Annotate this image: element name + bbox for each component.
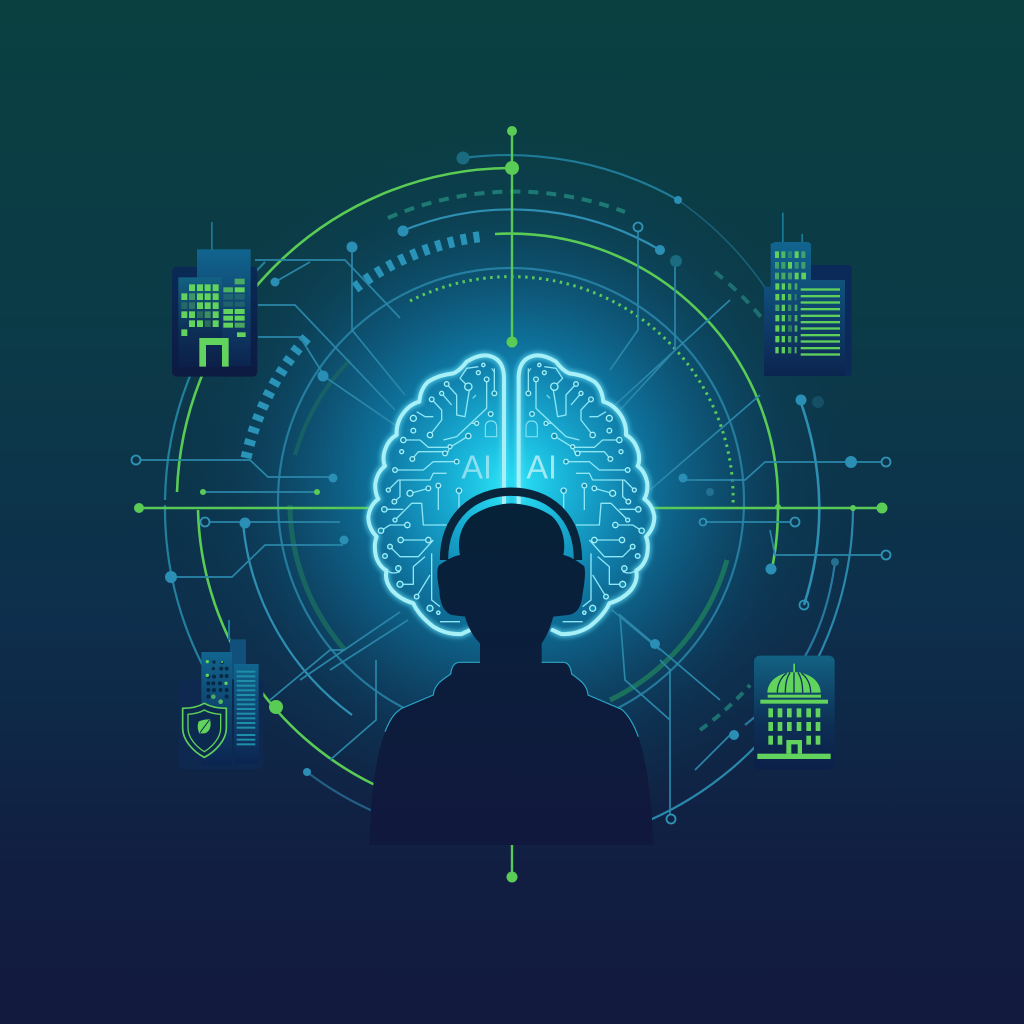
building: top right: [764, 213, 852, 376]
ring: inner blue: [278, 268, 744, 734]
hemisphere: right: [519, 355, 654, 634]
axis: green crosshair lines: [139, 131, 882, 877]
label: AI right: AI: [526, 450, 557, 487]
ring: dashed arcs: [388, 192, 625, 218]
nodes: [132, 126, 890, 882]
body: [369, 503, 653, 845]
central glow: [161, 130, 861, 830]
circuit traces: [141, 232, 881, 814]
headband: [444, 492, 578, 560]
icon: shield: [183, 703, 226, 757]
building: bottom right government dome: [754, 656, 835, 770]
person silhouette with headphones: [369, 492, 653, 845]
building: top left: [172, 222, 257, 377]
brain: [368, 355, 654, 634]
building: bottom left with shield: [179, 620, 263, 769]
hemisphere: left: [368, 355, 504, 634]
ring: green arcs: [177, 168, 512, 492]
ring: outer blue arcs: [165, 155, 853, 820]
concentric rings: [165, 155, 853, 820]
label: AI left: AI: [461, 450, 492, 487]
ring: dark green inner arcs: [290, 505, 345, 650]
shoulder outline: [385, 662, 638, 737]
ring: dotted green: [410, 277, 733, 507]
